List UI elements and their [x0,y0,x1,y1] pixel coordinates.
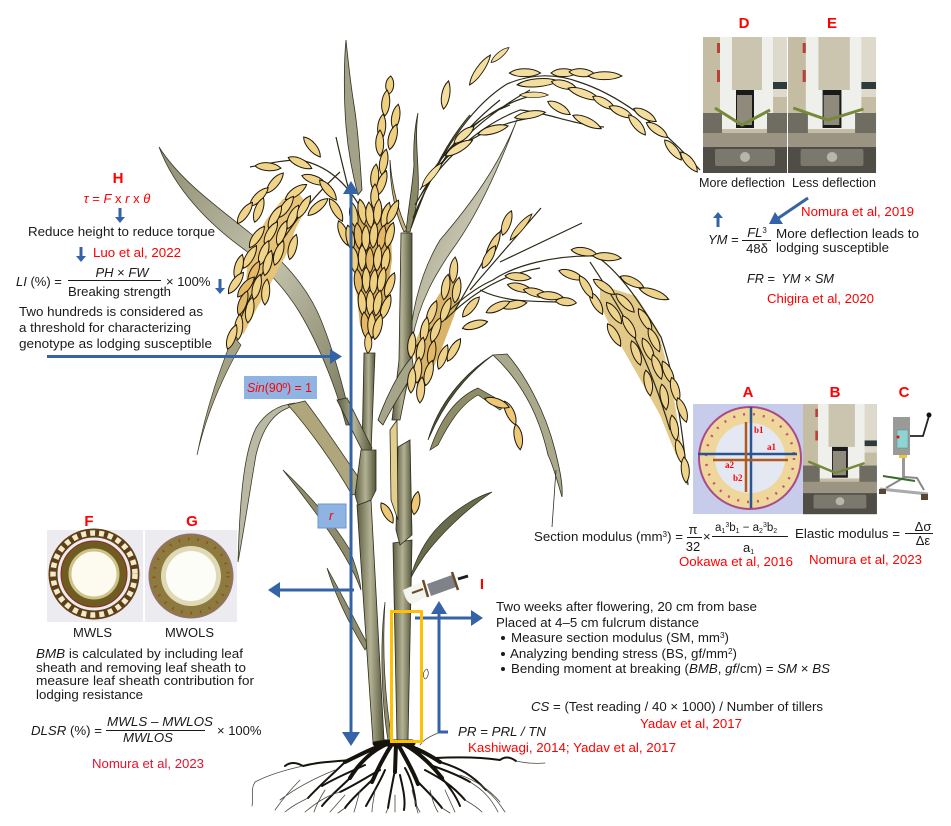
stems [337,113,418,742]
panicle: central upright [317,76,402,353]
leaf: left drooping arch [238,401,367,562]
elastic modulus formula: Δε [916,533,930,548]
panel H: torque and lodging index [16,170,225,351]
Young's modulus formula: FL [747,225,762,240]
citation Nomura 2023: Nomura et al, 2023 [809,552,922,567]
Young's modulus formula: YM = [708,232,739,247]
heading G: G [186,513,198,530]
citation Yadav: Yadav et al, 2017 [640,716,742,731]
bullet list: ) [725,630,729,645]
section modulus formula [534,522,788,556]
threshold text: genotype as lodging susceptible [19,336,212,351]
bullet list: Bending moment at breaking ( BMB, gf/cm) = SM × BS [511,661,830,676]
lodging index formula: PH × FW [95,265,150,280]
arrow down 1 [115,208,125,223]
photo A: stem cross section: a1 [767,442,776,452]
leaf: lower left narrow [197,336,241,455]
label box: r [318,504,346,528]
arrow down 3 [215,279,225,294]
photo A: stem cross section: a2 [725,460,734,470]
photo A: stem cross section: b1 [754,425,764,435]
icon C: prostrate tester [879,412,932,500]
BMB description: lodging resistance [36,687,143,702]
DLSR formula: MWLOS [123,730,173,745]
heading E: E [827,15,837,32]
section modulus formula: 2 [773,528,777,535]
section modulus formula: 2 [759,528,763,535]
citation Kashiwagi, Yadav: Kashiwagi, 2014; Yadav et al, 2017 [468,740,676,755]
icon: force gauge [403,572,468,604]
bullet list [501,630,830,676]
panicle: lower central cluster [407,209,534,403]
elastic modulus formula: Elastic modulus = [795,526,900,541]
section modulus formula: 1 [721,528,725,535]
leaves: narrow lower left [283,470,392,740]
DLSR formula [31,714,262,745]
heading D: D [739,15,750,32]
citation Chigira: Chigira et al, 2020 [767,291,874,306]
leaf: right long leaf [409,117,518,350]
panicle: lower right drooping [484,246,690,483]
elastic modulus formula: Δσ [915,519,931,534]
citation Luo: Luo et al, 2022 [93,245,181,260]
citation Nomura 2023: Nomura et al, 2023 [92,756,204,771]
label MWOLS: MWOLS [165,625,214,640]
flag leaf [344,40,362,195]
heading A: A [743,384,754,401]
lodging index formula: × 100% [166,274,211,289]
label more deflection: More deflection [699,175,785,190]
section modulus formula: 3 [763,522,767,529]
up arrow [713,212,723,227]
leaf: small lower arch [430,388,506,450]
photo G: without leaf sheath [145,530,237,622]
Young's modulus formula: 3 [762,226,767,235]
DLSR formula: DLSR (%) = [31,723,102,738]
panel F and G: leaf sheath contribution [31,513,262,771]
arrow: to measurement text [415,610,483,626]
flexural rigidity formula: FR = YM × SM [747,271,834,286]
label MWLS: MWLS [73,625,112,640]
heading F: F [84,513,94,530]
panicle: top right drooping [419,45,701,189]
BMB description [36,646,255,702]
photo A: stem cross section [693,404,803,514]
lodging index formula [16,265,211,299]
arrow: push resistance [431,601,448,732]
section modulus formula: b [767,522,773,534]
heading C: C [899,384,910,401]
threshold text: a threshold for characterizing [19,320,191,335]
lodging index formula: Breaking strength [68,284,171,299]
text: reduce height: Reduce height to reduce torque [28,224,215,239]
section modulus formula: ) = [667,529,683,544]
arrow down 2 [76,247,86,262]
Young's modulus formula: 48δ [746,241,768,256]
roots [252,732,545,813]
threshold text [19,304,212,351]
section modulus formula: a [715,522,721,534]
photo F: with leaf sheath [47,530,143,622]
label box: sin: Sin(90º) = 1 [247,380,312,395]
section modulus formula: a [743,540,750,555]
section modulus formula: 32 [686,539,700,554]
bullet list: 2 [728,647,733,656]
bullet list: Measure section modulus (SM, mm [511,630,715,645]
section modulus formula: Section modulus (mm [534,529,660,544]
horizontal arrow: force [47,349,342,364]
grains: near lower stem and small panicle [378,395,524,680]
section modulus formula: 3 [725,522,729,529]
culm strength formula: CS = (Test reading / 40 × 1000) / Number of tillers [531,699,823,714]
DLSR formula: × 100% [217,723,262,738]
photo E [788,37,876,173]
section modulus formula: 1 [750,549,754,556]
deflection note [776,226,919,255]
BMB description: measure leaf sheath contribution for [36,673,255,688]
protocol text: Placed at 4–5 cm fulcrum distance [496,615,699,630]
panel A, B, C: section modulus and elastic modulus [534,384,933,569]
panel I: push-pull test [403,572,830,755]
diagonal arrow [769,198,808,224]
section modulus formula: b [729,522,736,534]
leaf: long left leaf [159,147,352,425]
box: sampling zone [392,612,422,742]
elastic modulus formula [795,519,933,548]
section modulus formula: − a [740,522,760,534]
label box: r: r [329,508,334,523]
protocol text: Two weeks after flowering, 20 cm from base [496,599,757,614]
Young's modulus formula [708,225,771,256]
citation Ookawa: Ookawa et al, 2016 [679,554,793,569]
arrow: to panel F and G [268,582,354,598]
double-headed vertical arrow: plant height [342,181,360,746]
section modulus formula: 1 [736,528,740,535]
panel D and E: deflection tests [699,15,919,306]
BMB description: sheath and removing leaf sheath to [36,660,246,675]
protocol text [496,599,757,630]
photo A: stem cross section: b2 [733,473,743,483]
heading I: I [480,576,484,593]
leaf: lower right [409,492,492,582]
leaf: right arch [428,354,562,527]
bullet list: ) [733,646,737,661]
threshold text: Two hundreds is considered as [19,304,204,319]
lodging index formula: LI (%) = [16,274,62,289]
deflection note: lodging susceptible [776,240,889,255]
heading H: H [113,170,123,187]
rice plant illustration [159,40,701,813]
deflection note: More deflection leads to [776,226,919,241]
photo B: bending machine [803,404,877,514]
section modulus formula: π [689,522,698,537]
torque formula: τ = F x r x θ [84,191,150,206]
photo D [703,37,787,173]
label less deflection: Less deflection [792,175,876,190]
panicle dense fills [238,190,682,455]
panicle: left drooping [224,134,330,350]
section modulus formula: 3 [663,530,668,539]
bullet list: Analyzing bending stress (BS, gf/mm [510,646,723,661]
label box: sin [244,376,317,399]
bullet list: 3 [720,631,725,640]
panicle branches [232,76,700,485]
citation Nomura 2019: Nomura et al, 2019 [801,204,914,219]
heading B: B [830,384,841,401]
pushing resistance formula: PR = PRL / TN [458,724,547,739]
DLSR formula: MWLS – MWLOS [107,714,213,729]
section modulus formula: × [703,529,711,544]
BMB description: BMB is calculated by including leaf [36,646,243,661]
